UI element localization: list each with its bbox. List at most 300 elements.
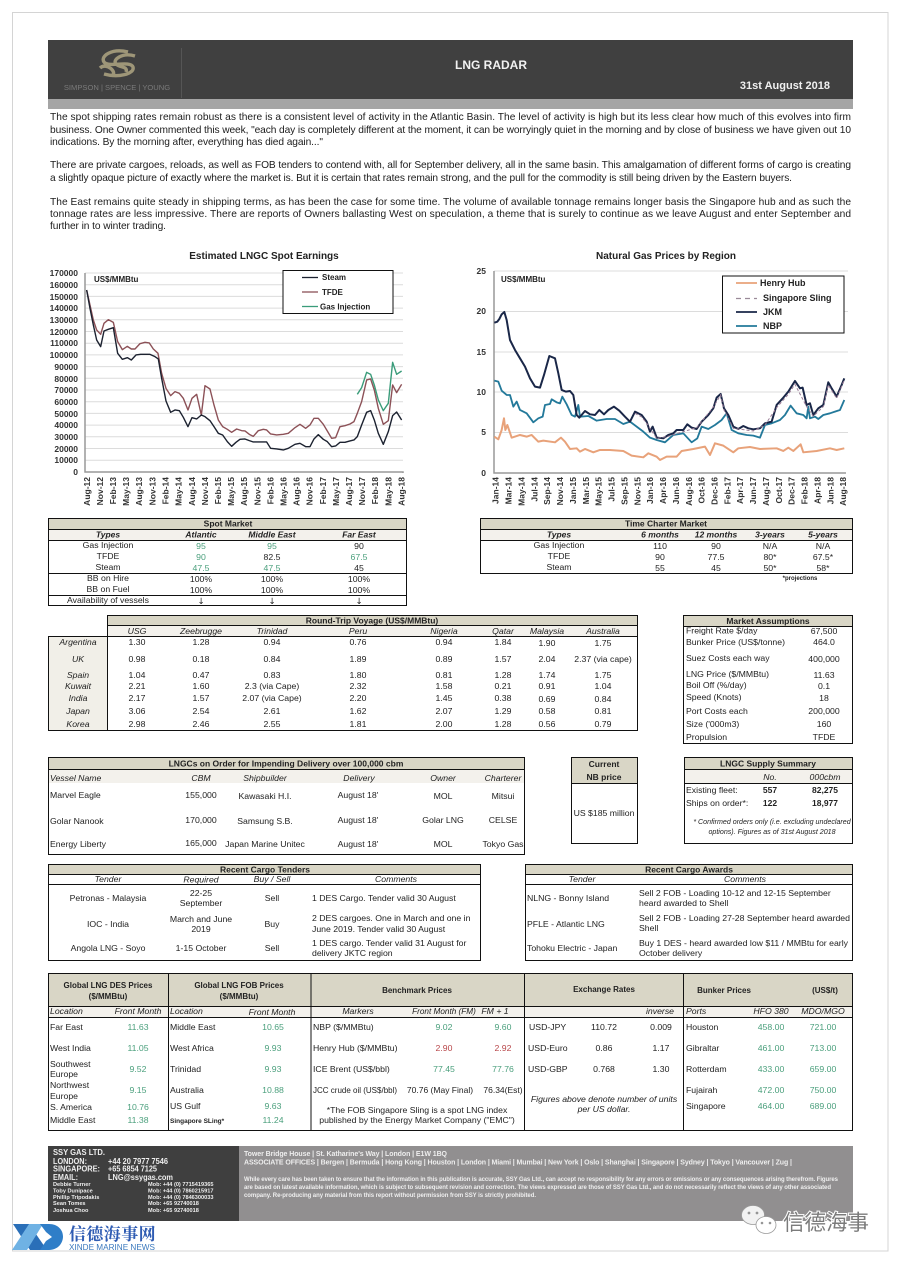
x axis labels: Apr-17	[735, 477, 745, 504]
column headers: Middle East	[248, 530, 297, 540]
rows: Golar LNG	[422, 815, 464, 825]
values	[808, 626, 840, 742]
panel: Global LNG DES Prices: Location	[50, 1006, 83, 1016]
column headers: Owner	[430, 773, 457, 783]
x axis labels: Oct-17	[774, 477, 784, 503]
panel: Bunker Prices: Gibraltar	[686, 1043, 719, 1053]
values	[129, 637, 632, 729]
values: 0.69	[539, 694, 556, 704]
panel: Exchange Rates: inverse	[646, 1006, 674, 1016]
values: 1.04	[129, 670, 146, 680]
values: 0.84	[264, 654, 281, 664]
footer contacts: SSY GAS LTD.	[53, 1148, 105, 1157]
x axis labels	[82, 477, 406, 506]
panel: Global LNG DES Prices: Southwest	[50, 1059, 91, 1069]
panel: Benchmark Prices: Benchmark Prices	[382, 986, 452, 995]
footer disclaimer	[244, 1177, 839, 1199]
rows: 22-25	[190, 888, 212, 898]
panel: Benchmark Prices: Markers	[342, 1006, 374, 1016]
rows: delivery JKTC region	[312, 948, 393, 958]
panel: Global LNG DES Prices: Far East	[50, 1022, 83, 1032]
x axis labels: Jan-15	[568, 477, 578, 504]
panel: Benchmark Prices: 77.76	[492, 1064, 514, 1074]
y axis labels: 60000	[54, 397, 78, 407]
rows: IOC - India	[87, 919, 129, 929]
panel: Global LNG DES Prices: Europe	[50, 1091, 78, 1101]
rows: 77.5	[708, 552, 725, 562]
rows: TFDE	[97, 551, 120, 561]
panel: Benchmark Prices: 9.60	[495, 1022, 512, 1032]
panel: Global LNG DES Prices: 10.76	[127, 1102, 149, 1112]
values: 1.57	[193, 693, 210, 703]
note	[693, 818, 852, 836]
rows: 90	[196, 552, 206, 562]
rows: 82.5	[264, 552, 281, 562]
rows: Sell	[265, 943, 279, 953]
x axis labels: Apr-18	[812, 477, 822, 504]
panel: Global LNG FOB Prices: Australia	[170, 1085, 204, 1095]
table: Spot Market: Spot Market	[204, 518, 252, 528]
rows: Samsung S.B.	[237, 816, 293, 826]
y axis labels: 5	[481, 427, 486, 437]
panel: Current NB price	[571, 757, 638, 844]
table: Recent Cargo Awards: Recent Cargo Awards	[645, 864, 733, 874]
x axis labels: Feb-16	[265, 477, 275, 504]
panel: Benchmark Prices: published by the Energy Market Company ("EMC")	[319, 1115, 515, 1125]
values: 1.29	[495, 706, 512, 716]
column headers: Required	[183, 874, 220, 884]
rows	[686, 785, 838, 808]
y axis labels: 20	[477, 306, 486, 316]
column headers: Tender	[95, 874, 122, 884]
rows: Mitsui	[492, 791, 514, 801]
table: Recent Cargo Tenders: Recent Cargo Tenders	[220, 864, 310, 874]
x axis labels: Sep-15	[619, 477, 629, 505]
y axis labels: 25	[477, 266, 486, 276]
axis unit: US$/MMBtu	[501, 275, 546, 284]
footer contacts: Mob: +44 (0) 7846300033	[148, 1195, 213, 1201]
date: 31st August 2018	[740, 80, 830, 92]
x axis labels: Feb-15	[213, 477, 223, 504]
values: 0.91	[539, 681, 556, 691]
rows: 90	[354, 541, 364, 551]
table: LNGC Supply Summary: LNGC Supply Summary	[720, 758, 816, 768]
commentary text: The East remains quite steady in shipping terms, as has been the case for some time. The volume of available tonnage remains longer basis the Singapore hub and as such the	[50, 197, 851, 208]
panel: Benchmark Prices: *The FOB Singapore Sling is a spot LNG index	[327, 1105, 508, 1115]
panel: Exchange Rates: 0.009	[650, 1022, 672, 1032]
x axis labels: May-14	[174, 477, 184, 506]
rows: MOL	[434, 839, 453, 849]
footer contacts: Mob: +44 (0) 7715419365	[148, 1182, 213, 1188]
table: LNGCs on Order	[48, 757, 524, 854]
rows: NLNG - Bonny Island	[527, 893, 609, 903]
rows: October delivery	[639, 948, 703, 958]
labels: Port Costs each	[686, 706, 748, 716]
values: 0.18	[193, 654, 210, 664]
panel: Global LNG FOB Prices: 10.65	[262, 1022, 284, 1032]
x axis labels: Aug-16	[684, 477, 694, 506]
labels: Freight Rate $/day	[686, 626, 758, 636]
rows: 90	[655, 552, 665, 562]
rows: 110	[653, 541, 667, 551]
y axis labels: 150000	[50, 292, 78, 302]
x axis labels: Oct-16	[697, 477, 707, 503]
values: 1.04	[595, 681, 612, 691]
panel: Global LNG DES Prices	[50, 981, 162, 1125]
panel: Global LNG FOB Prices: Middle East	[170, 1022, 216, 1032]
commentary text	[50, 112, 851, 232]
panel: Exchange Rates: 0.768	[593, 1064, 615, 1074]
y axis labels: 50000	[54, 409, 78, 419]
panel: Bunker Prices: 464.00	[758, 1101, 784, 1111]
table: Recent Cargo Tenders	[48, 864, 481, 960]
labels: Speed (Knots)	[686, 692, 742, 702]
note: * Confirmed orders only (i.e. excluding undeclared	[693, 818, 852, 826]
panel: Bunker Prices: MDO/MGO	[801, 1006, 845, 1016]
panel: Exchange Rates: USD-Euro	[528, 1043, 568, 1053]
footer contacts: Toby Dunipace	[53, 1188, 93, 1194]
column headers: 5-years	[808, 530, 838, 540]
legend: TFDE	[322, 288, 344, 297]
column headers: 12 months	[695, 530, 738, 540]
panel: Global LNG DES Prices: S. America	[50, 1102, 92, 1112]
panel: Global LNG DES Prices: Front Month	[115, 1006, 162, 1016]
labels: Suez Costs each way	[686, 653, 770, 663]
footer contacts: LNG@ssygas.com	[108, 1173, 173, 1182]
column headers: Buy / Sell	[254, 874, 291, 884]
panel: Benchmark Prices: JCC crude oil (US$/bbl)	[313, 1086, 397, 1095]
values: 1.74	[539, 670, 556, 680]
footer offices: ASSOCIATE OFFICES | Bergen | Bermuda | Hong Kong | Houston | London | Miami | Mumbai | New York | Oslo | Shanghai | Singapore | Sydney | Tokyo | Vancouver | Zug |	[244, 1160, 792, 1166]
rows: Angola LNG - Soyo	[71, 943, 146, 953]
x axis labels: May-18	[383, 477, 393, 506]
x axis labels: Jun-16	[671, 477, 681, 504]
x axis labels	[491, 477, 848, 506]
watermark: WeChat account	[742, 1206, 869, 1237]
line: JKM	[494, 312, 844, 438]
y axis labels: 30000	[54, 432, 78, 442]
table: Market Assumptions: Market Assumptions	[726, 616, 810, 626]
commentary text: further in to winter trading.	[50, 221, 166, 232]
panel: Bunker Prices: Rotterdam	[686, 1064, 727, 1074]
panel: Global LNG DES Prices: 9.15	[130, 1085, 147, 1095]
table: prices strip	[48, 973, 853, 1130]
column headers: Shipbuilder	[243, 773, 288, 783]
column headers: Tender	[569, 874, 596, 884]
column headers	[763, 772, 840, 782]
values: 160	[817, 719, 831, 729]
values: 0.21	[495, 681, 512, 691]
table: Market Assumptions	[683, 615, 853, 744]
panel: Current NB price: Current	[589, 759, 620, 769]
footer contacts: EMAIL:	[53, 1173, 78, 1182]
table: Round-Trip Voyage: Round-Trip Voyage (US$/MMBtu)	[306, 616, 438, 626]
rows: Shell	[639, 923, 658, 933]
panel: Benchmark Prices: ICE Brent (US$/bbl)	[313, 1064, 390, 1074]
column headers: No.	[763, 772, 777, 782]
watermark subtitle: XINDE MARINE NEWS	[69, 1243, 155, 1252]
panel: Bunker Prices: HFO 380	[753, 1006, 789, 1016]
x axis labels: Aug-17	[344, 477, 354, 506]
rows: June 2019. Tender valid 30 August	[312, 924, 446, 934]
rows: 18,977	[812, 798, 838, 808]
panel: Global LNG DES Prices: ($/MMBtu)	[89, 992, 128, 1001]
rows: 557	[763, 785, 777, 795]
panel: Bunker Prices: 461.00	[758, 1043, 784, 1053]
table: LNGCs on Order: LNGCs on Order for Impending Delivery over 100,000 cbm	[169, 758, 404, 768]
rows: Japan Marine Unitec	[225, 839, 305, 849]
footer contacts: LONDON:	[53, 1157, 87, 1166]
line: Singapore Sling	[635, 380, 844, 438]
column headers: Atlantic	[184, 530, 217, 540]
icon: WeChat bubbles	[742, 1206, 776, 1234]
x axis labels: Jan-14	[491, 477, 501, 504]
panel: Exchange Rates: USD-JPY	[529, 1022, 566, 1032]
values: 1.28	[193, 637, 210, 647]
panel: Exchange Rates: 1.30	[653, 1064, 670, 1074]
rows: PFLE - Atlantic LNG	[527, 919, 605, 929]
panel: Benchmark Prices: Front Month (FM)	[412, 1007, 476, 1016]
legend: Singapore Sling	[763, 293, 832, 303]
values: 0.79	[595, 719, 612, 729]
panel: Exchange Rates: USD-GBP	[528, 1064, 568, 1074]
panel: Global LNG FOB Prices: Global LNG FOB Prices	[194, 981, 284, 990]
x axis labels: Apr-16	[658, 477, 668, 504]
y axis labels: 140000	[50, 303, 78, 313]
panel: Global LNG DES Prices: 11.63	[127, 1022, 149, 1032]
values: 2.98	[129, 719, 146, 729]
rows: 45	[354, 563, 364, 573]
y axis labels: 170000	[50, 268, 78, 278]
rows: 170,000	[185, 815, 217, 825]
column headers: Malaysia	[530, 626, 564, 636]
values: 400,000	[808, 654, 840, 664]
panel: Global LNG FOB Prices: 9.93	[265, 1043, 282, 1053]
rows: 100%	[261, 574, 283, 584]
commentary text: indications. By the morning after, everything has died again..."	[50, 137, 323, 148]
footer contacts: Mob: +44 (0) 7860215917	[148, 1188, 213, 1194]
values: 2.04	[539, 654, 556, 664]
rows: Steam	[546, 562, 572, 572]
values: 1.45	[436, 693, 453, 703]
legend: Henry Hub	[760, 278, 806, 288]
rows: August 18'	[338, 815, 379, 825]
footer contacts: Mob: +65 92740018	[148, 1201, 199, 1207]
panel: Benchmark Prices: Henry Hub ($/MMBtu)	[313, 1043, 398, 1053]
rows: 100%	[261, 585, 283, 595]
panel: Bunker Prices: 472.00	[758, 1085, 784, 1095]
rows: 47.5	[193, 563, 210, 573]
panel: Bunker Prices: 689.00	[810, 1101, 836, 1111]
footer contacts	[53, 1148, 213, 1214]
chart title: Estimated LNGC Spot Earnings	[189, 251, 339, 262]
panel: Bunker Prices: 750.00	[810, 1085, 836, 1095]
column headers: Zeebrugge	[179, 626, 222, 636]
footer contacts: Mob: +65 92740018	[148, 1208, 199, 1214]
rows: Ships on order*:	[686, 798, 748, 808]
x axis labels: Nov-15	[632, 477, 642, 505]
rows	[527, 888, 850, 958]
rows: 45	[711, 563, 721, 573]
column headers: 000cbm	[810, 772, 840, 782]
rows: 2019	[191, 924, 211, 934]
values: 1.75	[595, 638, 612, 648]
icon: SSY knot logo	[100, 51, 135, 76]
panel: Global LNG DES Prices: West India	[50, 1043, 91, 1053]
values: 1.89	[350, 654, 367, 664]
values: 2.3 (via Cape)	[245, 681, 299, 691]
panel: Global LNG FOB Prices: West Africa	[170, 1043, 214, 1053]
footer offices	[244, 1151, 792, 1166]
panel: Benchmark Prices: 70.76 (May Final)	[407, 1085, 473, 1095]
watermark name: 信德海事网	[69, 1220, 156, 1245]
values: 2.61	[264, 706, 281, 716]
x axis labels: Feb-18	[800, 477, 810, 504]
x axis labels: Aug-16	[292, 477, 302, 506]
rows: 1-15 October	[176, 943, 226, 953]
x axis labels: Jul-15	[606, 477, 616, 502]
rows: 50*	[763, 563, 777, 573]
panel: Exchange Rates: 110.72	[591, 1022, 617, 1032]
y axis labels: 90000	[54, 362, 78, 372]
values: 2.00	[436, 719, 453, 729]
chart title: Natural Gas Prices by Region	[596, 251, 736, 262]
y axis labels: 110000	[50, 338, 78, 348]
column headers: Australia	[585, 626, 620, 636]
rows	[67, 540, 370, 607]
y axis labels: 80000	[54, 374, 78, 384]
rows: Tohoku Electric - Japan	[527, 943, 617, 953]
values: 1.80	[350, 670, 367, 680]
legend: JKM	[763, 307, 782, 317]
rows: 82,275	[812, 785, 838, 795]
footer contacts: Joshua Choo	[53, 1208, 89, 1214]
panel: Global LNG DES Prices: Europe	[50, 1069, 78, 1079]
values: 1.90	[539, 638, 556, 648]
x axis labels: Aug-18	[838, 477, 848, 506]
panel: Global LNG FOB Prices: ($/MMBtu)	[220, 992, 259, 1001]
commentary text: The spot shipping rates remain robust as there is a consistent level of activity in the Atlantic Basin. The level of activity is high but its less clear how much of this evolves into firm	[50, 112, 851, 123]
values: 1.28	[495, 719, 512, 729]
rows	[50, 790, 524, 849]
note: options). Figures as of 31st August 2018	[708, 828, 836, 836]
rows: August 18'	[338, 790, 379, 800]
values: 1.84	[495, 637, 512, 647]
icon: XD logo	[12, 1224, 63, 1250]
values: 2.20	[350, 693, 367, 703]
column headers	[128, 626, 620, 636]
y axis labels: 100000	[50, 350, 78, 360]
y axis labels: 120000	[50, 327, 78, 337]
column headers: Peru	[349, 626, 367, 636]
rows: Gas Injection	[534, 540, 585, 550]
labels: LNG Price ($/MMBtu)	[686, 669, 769, 679]
values: 0.89	[436, 654, 453, 664]
row labels: Argentina	[58, 637, 97, 647]
column headers	[547, 530, 838, 540]
y axis labels: 20000	[54, 444, 78, 454]
column headers: Trinidad	[257, 626, 289, 636]
x axis labels: Mar-15	[581, 477, 591, 504]
rows: 122	[763, 798, 777, 808]
values: 464.0	[813, 637, 835, 647]
panel: Bunker Prices: Bunker Prices	[697, 986, 751, 995]
y axis labels: 0	[73, 467, 78, 477]
row labels: India	[69, 693, 88, 703]
values: 0.83	[264, 670, 281, 680]
panel: Exchange Rates: per US dollar.	[577, 1104, 630, 1114]
column headers: Comments	[375, 874, 418, 884]
rows: 100%	[190, 585, 212, 595]
labels: Boil Off (%/day)	[686, 680, 747, 690]
x axis labels: Feb-17	[318, 477, 328, 504]
footer offices: Tower Bridge House | St. Katharine's Way | London | E1W 1BQ	[244, 1151, 448, 1158]
column headers: Delivery	[343, 773, 375, 783]
x axis labels: Jun-17	[748, 477, 758, 504]
panel: Global LNG FOB Prices: US Gulf	[170, 1101, 201, 1111]
rows: Golar Nanook	[50, 816, 104, 826]
x axis labels: Nov-16	[305, 477, 315, 505]
rows: 165,000	[185, 838, 217, 848]
x axis labels: Aug-15	[239, 477, 249, 506]
panel: Global LNG FOB Prices	[170, 981, 296, 1125]
rows: 1 DES cargo. Tender valid 31 August for	[312, 938, 466, 948]
panel: Bunker Prices: 458.00	[758, 1022, 784, 1032]
row labels: UK	[72, 654, 85, 664]
values: 67,500	[811, 626, 837, 636]
values: 0.1	[818, 681, 830, 691]
rows: 100%	[190, 574, 212, 584]
rows: BB on Fuel	[87, 584, 130, 594]
panel: Current NB price: NB price	[587, 772, 622, 782]
x axis labels: Aug-18	[396, 477, 406, 506]
column headers: USG	[128, 626, 147, 636]
rows: 67.5*	[813, 552, 834, 562]
x axis labels: Jun-18	[825, 477, 835, 504]
values: 0.76	[350, 637, 367, 647]
values: 0.81	[595, 706, 612, 716]
x axis labels: Feb-17	[722, 477, 732, 504]
footer disclaimer: While every care has been taken to ensure that the information in this publication is accurate, SSY Gas Ltd., can accept no responsibility for any errors or omissions or any consequences arising therefrom. Figures	[244, 1177, 839, 1183]
panel: Benchmark Prices	[313, 986, 523, 1125]
footer contacts: +65 6854 7125	[108, 1164, 157, 1174]
x axis labels: Feb-18	[370, 477, 380, 504]
panel: Benchmark Prices: 77.45	[433, 1064, 455, 1074]
x axis labels: Aug-12	[82, 477, 92, 506]
rows: Buy	[265, 919, 280, 929]
column headers: 6 months	[641, 530, 679, 540]
panel: Exchange Rates: 0.86	[596, 1043, 613, 1053]
panel: Global LNG DES Prices: 11.05	[127, 1043, 149, 1053]
row labels	[58, 637, 97, 729]
panel: Bunker Prices: Singapore	[686, 1101, 726, 1111]
values: 2.17	[129, 693, 146, 703]
x axis labels: Jan-16	[645, 477, 655, 504]
panel: Benchmark Prices: 9.02	[436, 1022, 453, 1032]
values: 18	[819, 693, 829, 703]
panel: Global LNG DES Prices: 9.52	[130, 1064, 147, 1074]
panel: Global LNG FOB Prices: 9.63	[265, 1101, 282, 1111]
rows: September	[180, 898, 222, 908]
y axis labels: 0	[481, 468, 486, 478]
values: 2.32	[350, 681, 367, 691]
x axis labels: Aug-14	[187, 477, 197, 506]
row labels: Kuwait	[65, 681, 92, 691]
chart: Natural Gas Prices by Region	[477, 251, 848, 506]
rows: Kawasaki H.I.	[238, 791, 292, 801]
footer contacts: +44 20 7977 7546	[108, 1157, 168, 1166]
rows: 100%	[348, 574, 370, 584]
